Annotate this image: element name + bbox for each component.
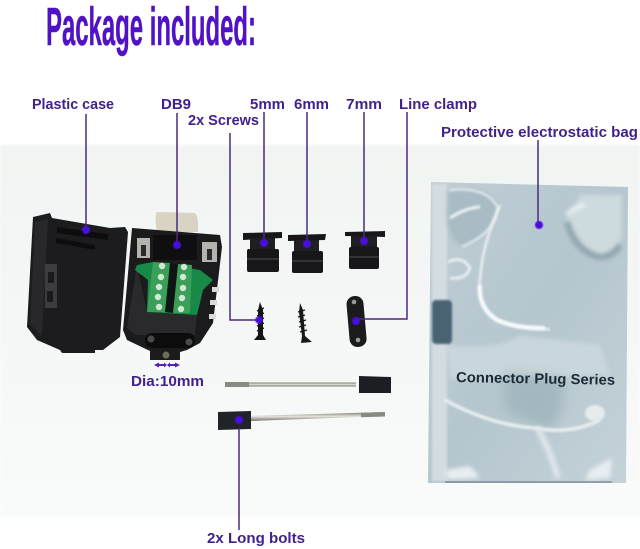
icon: 7mm cable gland [345,231,385,269]
bag print text: Connector Plug Series [456,370,615,389]
label: plastic case: Plastic case [32,96,114,113]
icon: 5mm cable gland [243,232,282,272]
label: protective bag: Protective electrostatic bag [441,124,638,141]
icon: protective bag [428,182,628,483]
icon: long bolt top [225,376,391,393]
label: 5mm: 5mm [250,96,285,113]
label: diameter: Dia:10mm [131,373,204,390]
terminal board [135,262,213,315]
icon: long bolt bottom [218,411,385,430]
label: long bolts: 2x Long bolts [207,530,305,547]
marker dots [82,221,543,424]
icon: plastic case cover [27,213,128,353]
icon: line clamp [346,295,367,348]
icon: screw left [254,302,266,340]
label: line clamp: Line clamp [399,96,477,113]
diameter arrow [154,362,180,368]
icon: screw right [298,303,312,343]
icon: open case with green terminal board [123,228,222,360]
leader lines [86,112,538,530]
label: 6mm: 6mm [294,96,329,113]
label: 2x screws: 2x Screws [188,112,259,129]
label: 7mm: 7mm [346,96,382,113]
icon: DB9 connector metal shell [156,212,198,232]
photo background [0,145,640,517]
label: DB9: DB9 [161,96,191,113]
icon: 6mm cable gland [288,234,326,273]
